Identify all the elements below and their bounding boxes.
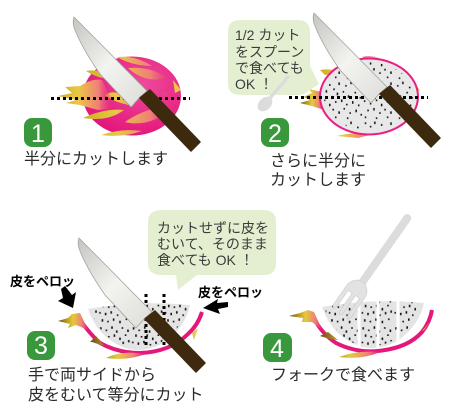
speech bubble: peel note: カットせずに皮を xyxy=(157,220,269,236)
badge: 4 xyxy=(263,333,292,363)
panel: step 2 xyxy=(228,13,440,189)
label: left peel: 皮をペロッ xyxy=(10,274,75,289)
speech bubble: spoon note: をスプーン xyxy=(235,44,304,60)
step text 2 xyxy=(270,152,366,189)
badge: 1: 1 xyxy=(31,120,45,148)
badge: 1 xyxy=(24,118,52,148)
panel: step 1 xyxy=(24,17,200,168)
step text 1: 半分にカットします xyxy=(24,150,168,168)
illustration: cut fruit in peel xyxy=(289,300,432,358)
badge: 3 xyxy=(27,331,55,360)
step text 4: フォークで食べます xyxy=(271,366,415,384)
arrow: right peel xyxy=(203,299,228,314)
step text 2: カットします xyxy=(270,171,366,189)
panel: step 4 xyxy=(263,212,432,384)
illustration: whole dragon fruit xyxy=(58,56,181,136)
panel: step 3 xyxy=(10,210,276,404)
icon: fork xyxy=(330,212,416,321)
step text 2: さらに半分に xyxy=(270,152,366,170)
badge: 2: 2 xyxy=(268,120,282,148)
badge: 4: 4 xyxy=(270,335,284,363)
badge: 3: 3 xyxy=(34,332,48,360)
cut line xyxy=(289,96,428,99)
speech bubble: peel note: むいて、そのまま xyxy=(157,236,268,252)
arrow: left peel xyxy=(58,286,76,308)
speech bubble: spoon note xyxy=(228,20,319,95)
speech bubble: peel note: 食べても OK ！ xyxy=(157,252,254,268)
illustration: halved dragon fruit xyxy=(300,56,420,138)
speech bubble: peel note xyxy=(148,210,276,290)
icon: spoon xyxy=(255,77,288,114)
step text 3: 手で両サイドから xyxy=(28,366,156,384)
icon: knife xyxy=(78,238,205,372)
speech bubble: spoon note: OK ！ xyxy=(235,76,273,92)
step text 3: 皮をむいて等分にカット xyxy=(28,386,204,404)
icon: knife xyxy=(313,13,440,147)
step text 3 xyxy=(28,366,204,404)
illustration: peeled fruit half xyxy=(58,294,202,359)
icon: knife xyxy=(73,17,200,151)
speech bubble: spoon note: で食べても xyxy=(235,60,304,76)
cut line xyxy=(51,97,190,100)
speech bubble: spoon note: 1/2 カット xyxy=(235,27,300,43)
badge: 2 xyxy=(261,118,289,148)
label: right peel: 皮をペロッ xyxy=(198,285,263,300)
